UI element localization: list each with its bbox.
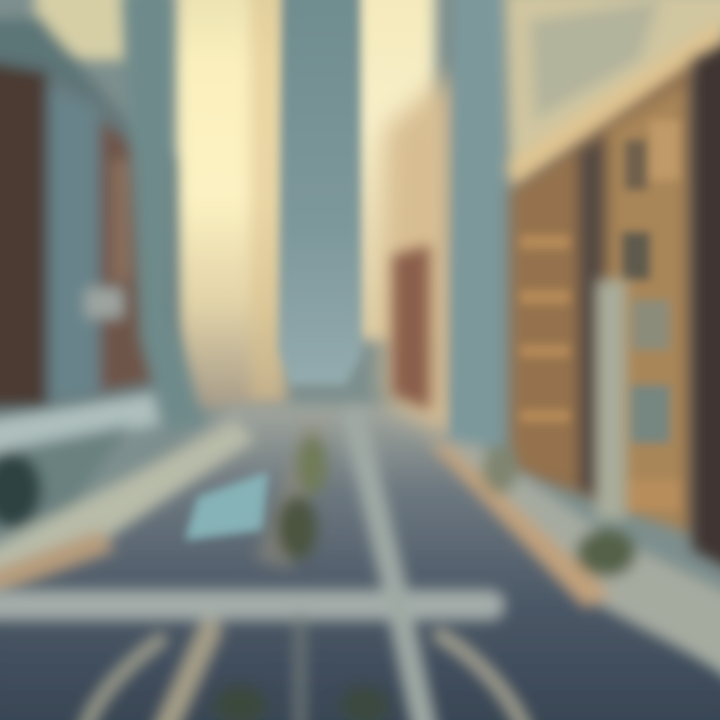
mid building door [392,245,430,410]
right dark edge [692,35,720,575]
left podium and sidewalk [0,392,255,600]
facade stripes and windows [520,120,680,510]
right upper facade [505,0,720,190]
right column [450,0,503,450]
center tower column [278,0,362,385]
right sidewalk [430,440,720,680]
right brown building [510,60,695,535]
water feature [185,472,268,540]
facade pale column [596,280,626,520]
median planting [214,420,389,720]
tan mid building [385,70,452,440]
street markings [0,420,525,720]
left building [0,18,180,420]
street surface [0,405,720,720]
left column [122,0,205,430]
sky glow [35,0,435,410]
